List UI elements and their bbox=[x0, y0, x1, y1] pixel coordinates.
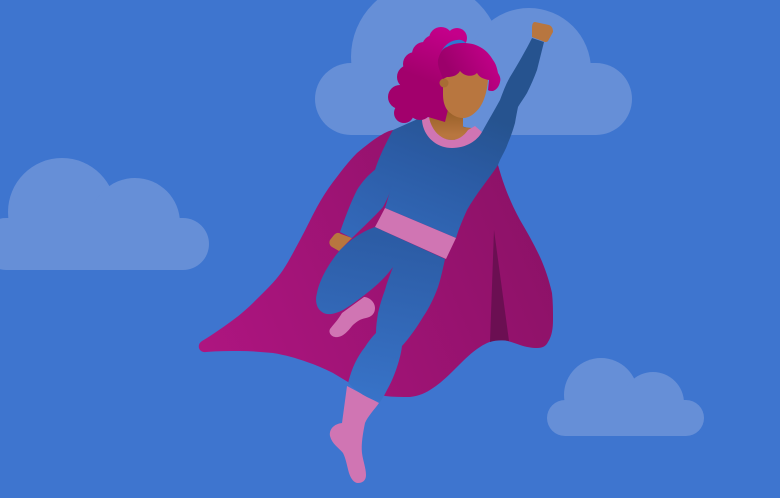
cape fold bbox=[490, 230, 509, 342]
hair band bbox=[439, 40, 466, 60]
near leg and knee bbox=[316, 227, 445, 402]
lower foot bbox=[330, 386, 379, 483]
ponytail curls bbox=[388, 27, 467, 123]
neck bbox=[429, 104, 472, 140]
hand at hip bbox=[329, 233, 352, 251]
cape bbox=[199, 130, 553, 397]
cloud: bottom right bbox=[547, 358, 704, 436]
ear bbox=[440, 78, 448, 88]
back foot bbox=[329, 297, 375, 337]
cloud: left bbox=[0, 158, 209, 270]
lower arm bbox=[340, 165, 394, 238]
cloud: top bbox=[315, 0, 632, 135]
fist bbox=[532, 22, 553, 42]
hair top and fringe bbox=[438, 43, 500, 91]
torso and raised arm bbox=[375, 38, 544, 238]
face bbox=[443, 70, 489, 118]
belt bbox=[375, 208, 456, 259]
collar bbox=[422, 117, 482, 148]
superhero figure bbox=[199, 22, 553, 483]
